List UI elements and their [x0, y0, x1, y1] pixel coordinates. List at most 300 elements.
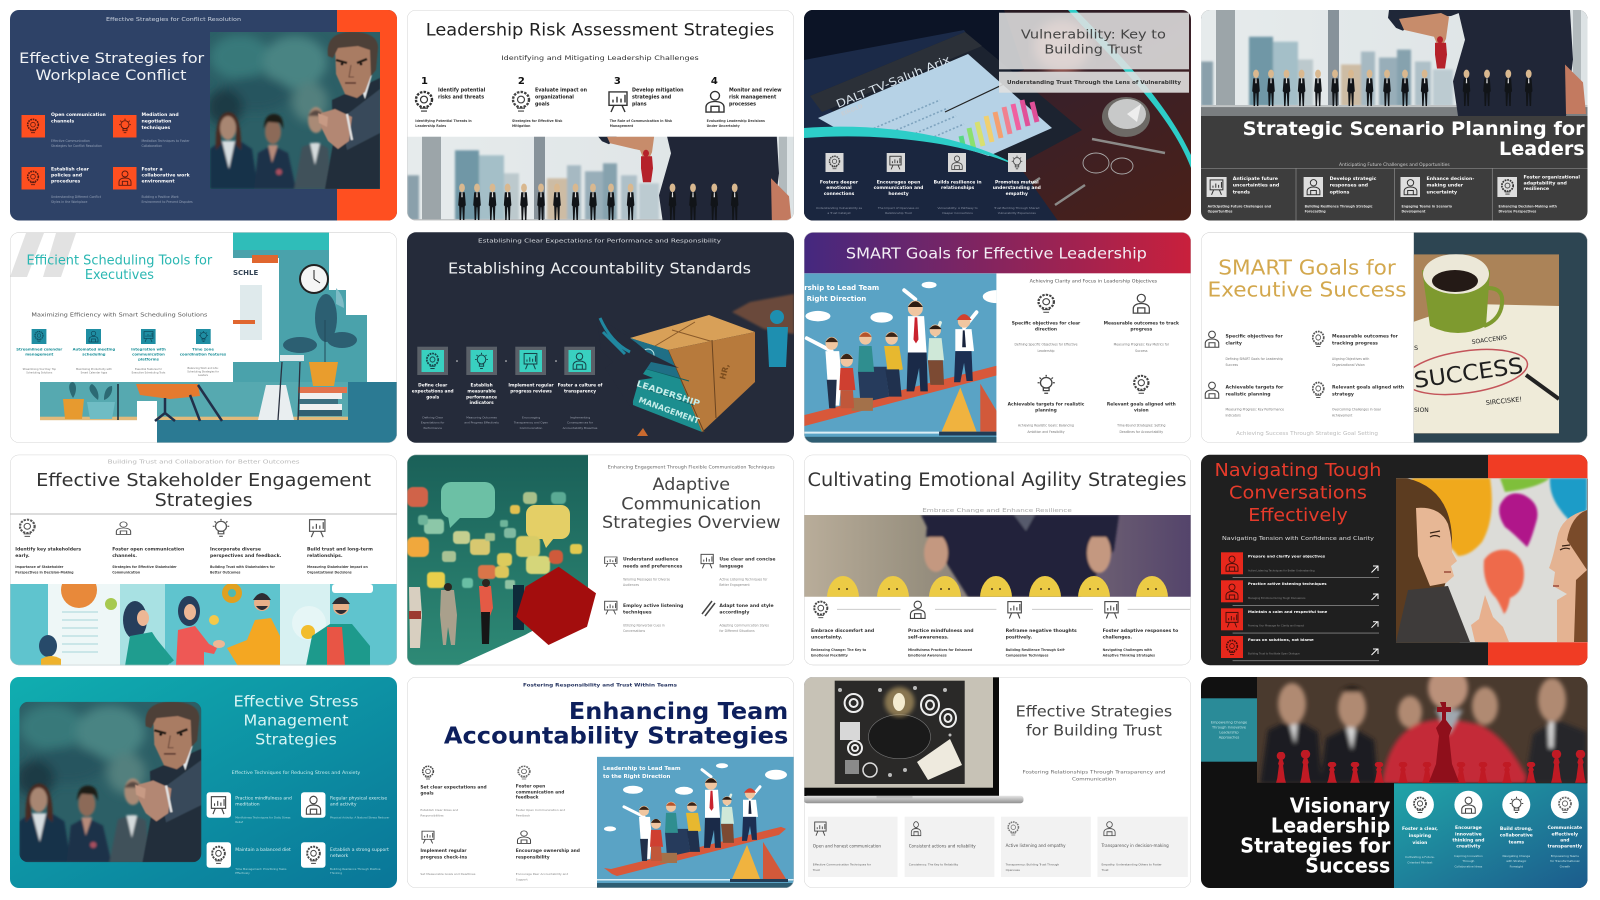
step 1: Leadership Roles: [415, 124, 446, 128]
item: fosters connections: Fosters deeper: [820, 179, 859, 185]
item: clear language: Use clear and concise: [719, 557, 776, 563]
illustration: team on seesaw: [597, 757, 794, 888]
item: embrace discomfort: Embracing Change: The Key to: [811, 648, 867, 652]
item: understand audience: Tailoring Messages for Diverse: [622, 578, 670, 582]
step 3: strategies and: [632, 94, 672, 100]
item: promotes understanding: understanding and: [993, 185, 1041, 191]
item: time zone coordination: Leaders: [198, 373, 209, 377]
item: fosters connections: emotional: [826, 185, 852, 191]
panel: efficient scheduling tools slide: [10, 232, 397, 444]
photo: coffee mug and success note: SOACCENIG: [1471, 334, 1508, 346]
item: long-term relationships: Measuring Stakeholder Impact on: [307, 565, 368, 569]
step: progress reviews: Encouraging: [522, 415, 540, 419]
list row 2: Managing Emotions During Tough Discussions: [1248, 596, 1306, 600]
list row 3: Framing Your Message for Clarity and Impact: [1248, 624, 1304, 628]
card: open communication: Trust: [812, 868, 821, 872]
title box: Vulnerability: Key to: [1021, 27, 1166, 42]
item: organizational adaptability: adaptability and: [1524, 180, 1567, 186]
item: progress check-ins: Set Measurable Goals and Deadlines: [420, 872, 476, 876]
panel: strategic scenario planning slide: [1201, 10, 1588, 221]
column: collaborative teams: with Strategic: [1506, 859, 1527, 863]
item: measurable outcomes: tracking progress: [1332, 340, 1378, 346]
item: clear policies: Understanding Different Conflict: [51, 195, 102, 199]
item: organizational adaptability: Enhancing Decision-Making with: [1498, 204, 1558, 208]
step: define expectations: goals: [426, 394, 440, 400]
slide title: Strategies: [255, 730, 337, 748]
slide title: Leaders: [1499, 138, 1585, 160]
list row 1: Active Listening Techniques for Better Understanding: [1248, 568, 1315, 572]
item: builds resilience: relationships: [941, 185, 974, 191]
item: decision making: making under: [1426, 183, 1464, 189]
title box: [999, 13, 1189, 69]
item: measurable outcomes: Measurable outcomes for: [1332, 334, 1399, 340]
item: mediation and negotiation: Mediation and: [142, 112, 179, 118]
slide title: Strategies: [155, 490, 253, 511]
header band: [804, 232, 1191, 273]
item: diverse perspectives: [210, 519, 282, 574]
item: long-term relationships: Build trust and long-term: [307, 547, 373, 553]
item: relevant goals: [1313, 382, 1404, 418]
item: time zone coordination: Scheduling Strategies for: [187, 370, 220, 374]
item: promotes understanding: [993, 153, 1041, 215]
item: clear expectations: Establish Clear Roles and: [420, 808, 458, 812]
item: strategic responses: options: [1330, 189, 1350, 195]
card: open communication: [808, 817, 898, 877]
column: transparent communication: [1547, 791, 1582, 868]
list row 3: Maintain a calm and respectful tone: [1248, 609, 1328, 614]
column: transparent communication: effectively: [1552, 832, 1578, 838]
panel: SMART goals leadership slide: [773, 232, 1191, 443]
item: diverse perspectives: perspectives and feedback.: [210, 553, 282, 559]
item: organizational adaptability: resilience: [1524, 186, 1549, 192]
panel: tough conversations slide: [1201, 454, 1588, 666]
decorative shape: red hexagon: [516, 567, 596, 645]
photo: coffee mug and success note: SION: [1414, 407, 1429, 414]
item: practice mindfulness: Mindfulness Practices for Enhanced: [908, 648, 973, 652]
column: transparent communication: transparently: [1547, 844, 1582, 850]
item: specific objectives: Leadership: [1037, 349, 1055, 353]
item: mindfulness: Relief: [235, 820, 244, 824]
item: time zone coordination: Time zone: [192, 346, 214, 352]
item: automated scheduling: scheduling: [82, 352, 106, 356]
slide subtitle: Fostering Responsibility and Trust Within Teams: [523, 682, 677, 688]
item: builds resilience: Deeper Connections: [942, 211, 973, 215]
panel: visionary leadership slide: [1201, 666, 1588, 888]
column: transparent communication: for Transformational: [1550, 859, 1580, 863]
text card backdrop: [10, 232, 233, 382]
step 2: [512, 76, 588, 128]
column: transparent communication: Growth: [1560, 864, 1570, 868]
item: collaborative environment: Foster a: [142, 166, 163, 172]
item: understand audience: needs and preferences: [623, 564, 683, 570]
step 1: risks and threats: [438, 94, 484, 100]
step: define expectations: Expectations for: [421, 421, 445, 425]
item: anticipate uncertainties: Anticipate future: [1233, 176, 1278, 182]
panel: building trust slide: [804, 677, 1191, 888]
panel: stress management slide: [10, 677, 397, 888]
slide title: Effectively: [1248, 505, 1348, 526]
step 1: Identify potential: [438, 88, 486, 94]
illustration: team on seesaw: Leadership to Lead Team: [780, 284, 879, 292]
item: support network: Building Resilience Through Positive: [330, 867, 381, 871]
item: relevant goals: Overcoming Challenges in Goal: [1332, 408, 1381, 412]
item: support network: Thinking: [329, 871, 342, 875]
item: embrace discomfort: uncertainty.: [811, 635, 843, 641]
column: collaborative teams: Build strong,: [1500, 826, 1533, 832]
item: encourages openness: honesty: [888, 191, 909, 197]
item: decision making: Enhance decision-: [1426, 176, 1474, 182]
item: adapt tone: [702, 601, 774, 633]
item: ownership: [516, 831, 580, 881]
slide subtitle: Building Trust and Collaboration for Better Outcomes: [108, 459, 300, 465]
illustration: team on seesaw: to the Right Direction: [603, 774, 670, 780]
item: promotes understanding: Vulnerability Experiences: [998, 211, 1036, 215]
item: open channels: Strategies for Effective Stakeholder: [112, 565, 177, 569]
item: collaborative environment: Environment to Prevent Disputes: [142, 200, 193, 204]
item: long-term relationships: relationships.: [307, 553, 343, 559]
item: anticipate uncertainties: uncertainties and: [1233, 183, 1279, 189]
slide title: Adaptive: [653, 475, 730, 495]
item: collaborative environment: Building a Positive Work: [142, 195, 179, 199]
slide title: SMART Goals for: [1218, 255, 1397, 279]
step: performance indicators: indicators: [469, 400, 494, 406]
item: adaptive responses: [1103, 602, 1178, 658]
illustration: laptop with strategy board: [804, 677, 1024, 803]
item: balanced diet: Time Management: Prioritizing Tasks: [234, 867, 287, 871]
item: specific objectives: Specific objectives for: [1226, 334, 1283, 340]
item: open communication channels: Effective Communication: [51, 139, 90, 143]
item: encourages openness: communication and: [874, 185, 923, 191]
item: diverse perspectives: Better Outcomes: [210, 570, 241, 574]
item: open communication channels: Open communication: [51, 112, 106, 118]
teal note: Through Innovative: [1211, 726, 1246, 730]
slide subtitle: Effective Techniques for Reducing Stress and Anxiety: [232, 770, 361, 775]
step 4: risk management: [729, 94, 777, 100]
item: promotes understanding: Trust Building Through Shared: [993, 206, 1040, 210]
item: identify stakeholders: Importance of Stakeholder: [15, 565, 64, 569]
teal note: Approaches: [1219, 736, 1239, 740]
item: strategic responses: Develop strategic: [1330, 176, 1377, 182]
item: adaptive responses: challenges.: [1103, 635, 1132, 641]
item: strategic responses: [1304, 176, 1377, 214]
photo: coffee mug and success note: SIRCCISKE!: [1485, 395, 1522, 407]
illustration: team on seesaw: [773, 273, 1019, 443]
item: identify stakeholders: early.: [15, 553, 30, 559]
photo: coffee mug and success note: SUCCESS: [1412, 354, 1525, 394]
item: specific objectives: Defining Specific Objectives for Effective: [1014, 342, 1078, 346]
illustration: people shaking hands: [10, 572, 397, 666]
panel: emotional agility slide: [804, 454, 1191, 666]
step 3: The Role of Communication in Risk: [610, 119, 673, 123]
item: ownership: responsibility: [516, 854, 550, 860]
item: platform integration: Executive Scheduling Tools: [132, 370, 166, 374]
column: inspiring vision: [1402, 791, 1438, 864]
item: adaptive responses: Foster adaptive responses to: [1103, 628, 1178, 634]
item: measurable outcomes: Organizational Vision: [1332, 363, 1365, 367]
item: fosters connections: a Trust Catalyst: [827, 211, 851, 215]
item: clear language: Better Engagement: [719, 583, 751, 587]
card: active listening: [1001, 817, 1091, 877]
item: specific objectives: [1012, 295, 1081, 353]
photo: angry man pointing: [16, 702, 201, 862]
item: clear policies: procedures: [51, 179, 80, 185]
item: understand audience: Audiences: [623, 583, 639, 587]
item: adaptive responses: Adaptive Thinking Strategies: [1103, 654, 1155, 658]
step 3: 3: [614, 76, 621, 87]
illustration: office with clock and plant: SCHLE: [233, 269, 258, 277]
panel: accountability standards slide: [407, 232, 794, 443]
slide title: Management: [244, 712, 349, 730]
item: measurable outcomes: Success: [1135, 349, 1148, 353]
card: active listening: Openness: [1006, 868, 1020, 872]
item: specific objectives: Defining SMART Goals for Leadership: [1226, 357, 1283, 361]
subtitle box: [999, 72, 1189, 93]
item: achievable targets: planning: [1035, 408, 1057, 414]
item: clear expectations: Responsibilities: [420, 813, 444, 817]
item: relevant goals: strategy: [1332, 391, 1354, 397]
item: active listening: Utilizing Nonverbal Cues in: [623, 624, 665, 628]
slide subtitle: Anticipating Future Challenges and Opportunities: [1339, 162, 1450, 168]
list row 3: [1221, 608, 1379, 633]
slide title: Leadership Risk Assessment Strategies: [426, 20, 774, 40]
photo: tablet with charts on desk: [804, 10, 1165, 205]
card: active listening: Transparency: Building Trust Through: [1005, 863, 1059, 867]
photo: hand lifting red figure: [1201, 10, 1588, 116]
card: transparency: Trust: [1100, 868, 1109, 872]
item: balanced diet: Maintain a balanced diet: [235, 847, 291, 853]
photo: smiling eggs below suited man: [804, 515, 1191, 620]
item: builds resilience: [934, 153, 982, 215]
slide title: Conversations: [1229, 482, 1367, 503]
item: adapt tone: accordingly: [719, 610, 749, 616]
item: achievable targets: Ambition and Feasibility: [1027, 430, 1065, 434]
item: anticipate uncertainties: [1207, 176, 1279, 214]
item: mindfulness: Mindfulness Techniques for Daily Stress: [235, 815, 291, 819]
step: performance indicators: and Progress Effectively: [464, 421, 499, 425]
item: ownership: Encourage Peer Accountability and: [516, 872, 568, 876]
step: define expectations: [412, 347, 454, 430]
panel: vulnerability slide: [804, 10, 1191, 221]
item: relevant goals: Time-Bound Strategies: Setting: [1116, 424, 1166, 428]
item: balanced diet: Effectively: [235, 871, 250, 875]
slide title: Effective Strategies for: [19, 51, 204, 67]
item: mediation and negotiation: [113, 112, 190, 148]
item: achievable targets: Achievable targets for realistic: [1008, 401, 1085, 407]
slide subtitle: Embrace Change and Enhance Resilience: [922, 508, 1072, 514]
item: practice mindfulness: self-awareness.: [908, 635, 949, 641]
item: encourages openness: Relationship Trust: [885, 211, 913, 215]
item: mindfulness: Practice mindfulness and: [235, 796, 292, 802]
step 2: Evaluate impact on: [535, 88, 588, 94]
item: automated scheduling: Maximizing Productivity with: [76, 367, 112, 371]
illustration: team on seesaw: to the Right Direction: [780, 295, 866, 303]
slide title: Strategic Scenario Planning for: [1243, 118, 1585, 140]
item: reframe thoughts: [1006, 602, 1077, 658]
step: culture of transparency: Accountability Breaches: [563, 426, 598, 430]
slide title: Strategies Overview: [602, 513, 781, 533]
item: understand audience: [605, 557, 683, 587]
item: support network: network: [330, 853, 349, 859]
item: active listening: Conversations: [623, 629, 645, 633]
slide title: Effective Strategies: [1016, 703, 1172, 721]
item: open communication: Foster open: [516, 784, 545, 790]
item: identify stakeholders: Identify key stakeholders: [15, 547, 81, 553]
step: define expectations: expectations and: [412, 388, 454, 394]
item: specific objectives: [1205, 331, 1283, 367]
slide title: Communication: [621, 494, 761, 514]
card: consistent actions: Consistency: The Key to Reliability: [909, 863, 959, 867]
step: culture of transparency: transparency: [564, 388, 596, 394]
item: open communication channels: [22, 112, 106, 148]
photo: coffee mug and success note: S: [1414, 344, 1418, 352]
item: encourages openness: The Impact of Openness on: [877, 206, 919, 210]
column: collaborative teams: teams: [1508, 840, 1524, 846]
column: inspiring vision: Oriented Mindset: [1407, 860, 1433, 864]
illustration: team on seesaw: Leadership to Lead Team: [603, 766, 681, 772]
item: automated scheduling: Smart Calendar Apps: [81, 370, 108, 374]
step: performance indicators: Establish: [471, 383, 493, 389]
item: achievable targets: Measuring Progress: Key Performance: [1226, 408, 1284, 412]
panel: workplace conflict slide: [10, 10, 397, 221]
step: culture of transparency: [558, 347, 603, 430]
step 2: Strategies for Effective Risk: [512, 119, 563, 123]
photo: angry man pointing: [207, 32, 380, 189]
slide subtitle: Effective Strategies for Conflict Resolution: [106, 17, 242, 23]
item: balanced diet: [207, 842, 291, 875]
item: active listening: Employ active listening: [623, 603, 683, 609]
item: specific objectives: Specific objectives for clear: [1012, 320, 1081, 326]
item: anticipate uncertainties: Anticipating Future Challenges and: [1208, 204, 1272, 208]
column: innovative thinking: Inspiring Innovation: [1454, 854, 1483, 858]
item: adapt tone: for Different Situations: [719, 629, 755, 633]
item: active listening: [605, 601, 683, 633]
step: define expectations: Defining Clear: [422, 415, 444, 419]
item: physical exercise: [301, 792, 390, 819]
slide title: Enhancing Team: [569, 699, 788, 725]
slide title: for Building Trust: [1026, 722, 1162, 740]
step: performance indicators: performance: [466, 394, 497, 400]
item: adapt tone: Adapting Communication Styles: [719, 624, 769, 628]
item: automated scheduling: [73, 329, 116, 374]
item: measurable outcomes: Measurable outcomes to track: [1104, 320, 1179, 326]
item: platform integration: Essential Features for: [135, 367, 163, 371]
step 2: 2: [518, 76, 525, 87]
item: specific objectives: clarity: [1226, 340, 1242, 346]
step: culture of transparency: Implementing: [570, 415, 590, 419]
item: identify stakeholders: Perspectives in Decision-Making: [15, 570, 74, 574]
step: progress reviews: Implement regular: [508, 383, 554, 389]
step 3: Develop mitigation: [632, 88, 684, 94]
item: calendar management: management: [25, 352, 54, 356]
column: innovative thinking: [1452, 791, 1484, 868]
item: adapt tone: Adapt tone and style: [719, 603, 774, 609]
item: time zone coordination: [180, 329, 227, 377]
slide subtitle: Enhancing Engagement Through Flexible Communication Techniques: [608, 464, 775, 469]
item: mindfulness: [207, 792, 292, 824]
column: inspiring vision: Foster a clear,: [1402, 826, 1438, 832]
item: progress check-ins: progress check-ins: [420, 854, 467, 860]
item: reframe thoughts: Reframe negative thoughts: [1006, 628, 1077, 634]
item: promotes understanding: Promotes mutual: [995, 179, 1039, 185]
panel: SMART goals executive slide: [1201, 232, 1588, 443]
item: reframe thoughts: Building Resilience Through Self-: [1006, 648, 1066, 652]
title box: Building Trust: [1044, 42, 1142, 57]
item: open channels: [112, 522, 184, 574]
panel: team accountability slide: [407, 677, 794, 888]
item: time zone coordination: coordination features: [180, 352, 227, 356]
column: inspiring vision: Cultivating a Future-: [1405, 855, 1435, 859]
slide title: Visionary: [1290, 793, 1390, 817]
step: performance indicators: Measuring Outcomes: [466, 415, 497, 419]
item: collaborative environment: [113, 166, 193, 204]
list row 4: Building Trust to Facilitate Open Dialogue: [1248, 652, 1300, 656]
column: innovative thinking: Through: [1461, 859, 1475, 863]
column: inspiring vision: vision: [1412, 840, 1427, 846]
item: clear policies: policies and: [51, 173, 82, 179]
item: relevant goals: Relevant goals aligned with: [1332, 384, 1404, 390]
item: achievable targets: Achievable targets for: [1226, 384, 1284, 390]
item: long-term relationships: Organizational Decisions: [307, 570, 352, 574]
card: open communication: Effective Communication Techniques for: [813, 863, 872, 867]
item: clear expectations: [420, 766, 487, 817]
illustration: leadership cube: LEADERSHIP: [635, 379, 701, 409]
item: clear expectations: Set clear expectations and: [420, 784, 487, 790]
subtitle box: Understanding Trust Through the Lens of Vulnerability: [1007, 80, 1182, 86]
photo: coffee mug and success note: [1402, 254, 1560, 434]
item: builds resilience: Builds resilience in: [934, 179, 982, 185]
step 4: Under Uncertainty: [707, 124, 741, 128]
step: performance indicators: [464, 347, 499, 425]
panel: leadership risk assessment slide: [407, 10, 794, 230]
item: strategic responses: Building Resilience Through Strategic: [1305, 204, 1373, 208]
item: adaptive responses: Navigating Challenges with: [1103, 648, 1153, 652]
item: collaborative environment: environment: [142, 179, 175, 185]
item: organizational adaptability: [1497, 174, 1580, 214]
item: relevant goals: [1107, 376, 1176, 434]
photo: two girls talking: [1396, 478, 1587, 643]
step 3: plans: [632, 101, 647, 107]
step 2: organizational: [535, 94, 574, 100]
item: achievable targets: Indicators: [1226, 414, 1241, 418]
slide title: Efficient Scheduling Tools for: [27, 253, 213, 268]
step 4: Evaluating Leadership Decisions: [707, 119, 765, 123]
item: ownership: Support: [516, 877, 528, 881]
item: diverse perspectives: Building Trust with Stakeholders for: [210, 565, 275, 569]
item: open channels: Communication: [112, 570, 141, 574]
card: consistent actions: Consistent actions and reliability: [909, 844, 976, 848]
item: mediation and negotiation: Collaboration: [142, 144, 162, 148]
item: support network: [301, 842, 389, 875]
step 3: Management: [610, 124, 634, 128]
slide title: Success: [1305, 854, 1390, 878]
slide title: Workplace Conflict: [36, 68, 187, 84]
item: active listening: techniques: [623, 610, 652, 616]
item: promotes understanding: empathy: [1006, 191, 1028, 197]
item: physical exercise: and activity: [330, 802, 357, 808]
step: performance indicators: measurable: [467, 388, 496, 394]
item: long-term relationships: [307, 520, 373, 574]
item: clear policies: [22, 166, 102, 204]
step: define expectations: Performance: [424, 426, 442, 430]
item: clear policies: Establish clear: [51, 166, 90, 172]
card: open communication: Open and honest communication: [813, 844, 881, 848]
item: anticipate uncertainties: Opportunities: [1208, 210, 1233, 214]
item: understand audience: Understand audience: [623, 557, 678, 563]
item: open channels: channels.: [112, 553, 137, 559]
item: mediation and negotiation: techniques: [142, 125, 170, 131]
item: strategic responses: responses and: [1330, 183, 1368, 189]
slide title: Effective Stakeholder Engagement: [36, 470, 371, 491]
